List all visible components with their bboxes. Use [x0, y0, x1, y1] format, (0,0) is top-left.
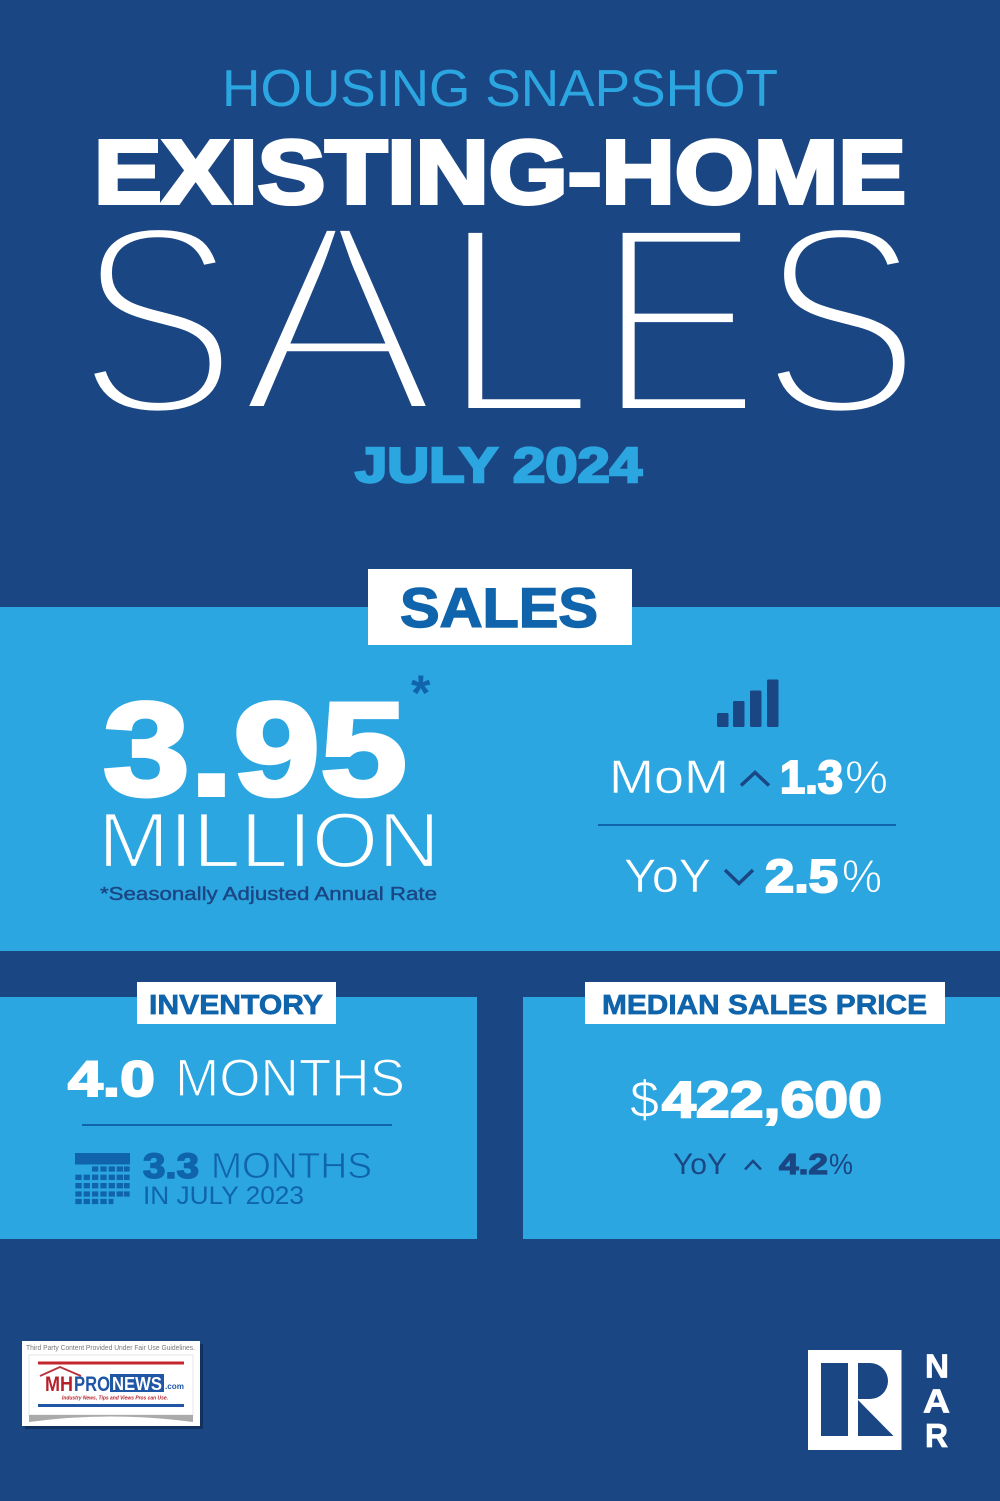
icon: bar chart [717, 680, 778, 727]
median price value: 422,600 [662, 1071, 882, 1128]
month over month [609, 750, 888, 803]
icon: up chevron [741, 772, 769, 786]
month over month: % [845, 751, 888, 803]
logo: MHProNews: Industry News, Tips and Views Pros can Use. [62, 1396, 168, 1402]
title: sales: S [760, 168, 921, 472]
sales label: SALES [400, 576, 598, 639]
year over year: 2.5 [765, 850, 838, 902]
title: sales: E [597, 168, 761, 472]
median price change: 4.2 [779, 1149, 828, 1181]
inventory months [68, 1049, 405, 1108]
logo: MHProNews: PRO [74, 1373, 110, 1396]
asterisk: * [411, 665, 431, 721]
prior year inventory: 3.3 [143, 1147, 199, 1186]
panel: median sales price [523, 982, 1000, 1239]
inventory months: MONTHS [175, 1049, 405, 1108]
title: sales: S [77, 168, 238, 472]
logo: NAR letters: A [923, 1382, 950, 1420]
logo: MHProNews [22, 1341, 203, 1429]
panel: sales [0, 569, 1000, 951]
logo: MHProNews: MH [45, 1373, 73, 1396]
inventory months: 4.0 [68, 1051, 155, 1107]
eyebrow heading: HOUSING SNAPSHOT [222, 60, 778, 118]
median price change: % [829, 1149, 853, 1181]
icon: down chevron [725, 870, 753, 884]
footnote: *Seasonally Adjusted Annual Rate [100, 884, 437, 904]
title: sales: A [239, 166, 437, 470]
prior year inventory [143, 1145, 372, 1210]
year over year [624, 849, 882, 902]
prior year inventory: MONTHS [211, 1145, 372, 1186]
date: JULY 2024 [355, 439, 642, 493]
title: existing-home: EXISTING-HOME [94, 123, 906, 223]
median price label [585, 982, 945, 1024]
logo: MHProNews: .com [165, 1382, 184, 1391]
icon: small up chevron [745, 1161, 761, 1170]
million: MILLION [98, 796, 440, 884]
icon: calendar [75, 1153, 130, 1204]
inventory label: INVENTORY [149, 989, 323, 1020]
median price value: $ [630, 1071, 659, 1129]
year over year: YoY [624, 849, 711, 902]
inventory label [137, 982, 336, 1024]
median price label: MEDIAN SALES PRICE [602, 989, 927, 1020]
month over month: 1.3 [780, 751, 843, 803]
year over year: % [842, 850, 882, 902]
logo: NAR letters: R [925, 1417, 948, 1454]
logo: NAR letters: N [925, 1348, 949, 1384]
month over month: MoM [609, 750, 729, 803]
headline number: 3.95 [103, 676, 407, 824]
median price change [673, 1148, 853, 1181]
title: sales [77, 166, 921, 472]
median price change: YoY [673, 1148, 727, 1181]
logo: NAR realtor block [808, 1350, 902, 1450]
logo: MHProNews: Third Party Content Provided Under Fair Use Guidelines. [26, 1345, 195, 1352]
panel: inventory [0, 982, 477, 1239]
sales label [368, 569, 632, 645]
prior year inventory: IN JULY 2023 [143, 1182, 304, 1210]
logo: MHProNews: NEWS [112, 1374, 162, 1394]
logo: NAR letters [923, 1348, 950, 1454]
title: sales: L [439, 168, 596, 472]
